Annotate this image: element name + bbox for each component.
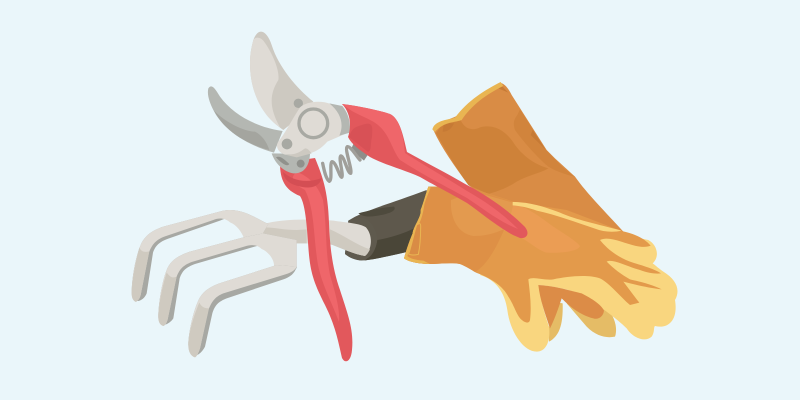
between fingers shadow — [538, 285, 604, 328]
shears lower blade — [208, 86, 283, 153]
glove fingers yellow lining — [480, 230, 677, 352]
icon: pruning shears — [208, 32, 527, 361]
glove yellow seam — [513, 202, 622, 232]
palm highlight — [503, 204, 580, 253]
icon: hand rake — [132, 190, 430, 357]
glove cuff edge — [404, 187, 431, 264]
glove cuff tone — [404, 187, 513, 272]
shears pivot plate — [272, 102, 350, 173]
shears upper blade — [250, 32, 313, 130]
back glove — [432, 82, 623, 237]
icon: gardening gloves — [404, 82, 677, 352]
glove cuff inner — [409, 224, 421, 255]
shears spring — [323, 143, 368, 181]
shears lower handle — [280, 158, 352, 361]
front glove — [404, 187, 662, 323]
cuff highlight — [451, 192, 514, 236]
rake shaft — [259, 219, 371, 256]
rake tine 1 — [132, 210, 268, 302]
rake tine 2 — [158, 233, 297, 326]
shears upper handle — [342, 104, 527, 238]
rake dark grip — [345, 190, 430, 260]
rake tine 3 — [188, 265, 297, 357]
back fingers shade — [548, 297, 616, 342]
